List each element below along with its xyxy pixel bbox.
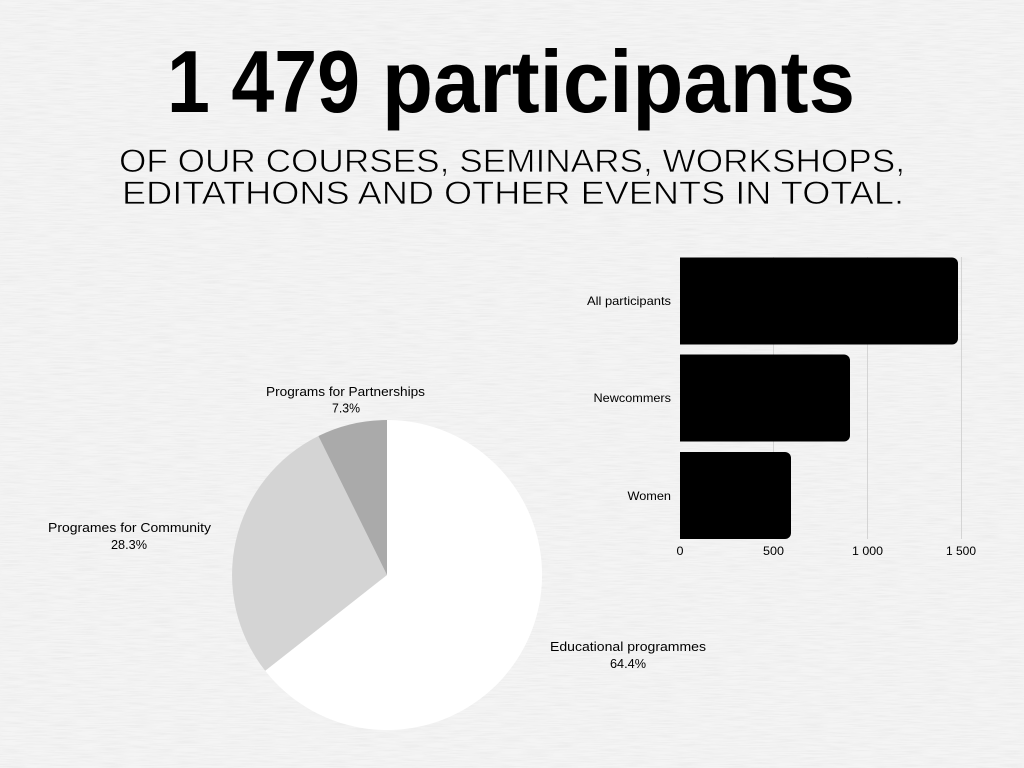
label: educational programmes: 64.4% <box>610 657 646 671</box>
label: educational programmes: Educational programmes <box>550 640 706 654</box>
label: programes for community: Programes for Community <box>48 521 212 535</box>
subtitle: OF OUR COURSES, SEMINARS, WORKSHOPS, <box>119 143 905 179</box>
category labels: Newcommers <box>594 391 671 405</box>
label: programs for partnerships: Programs for Partnerships <box>266 385 425 399</box>
axis labels: 0 <box>676 544 684 558</box>
slice: programs for partnerships 7.3% <box>318 420 387 575</box>
slice: programes for community 28.3% <box>232 436 387 671</box>
subtitle <box>119 143 905 211</box>
bar: newcommers <box>680 354 850 442</box>
label: programs for partnerships <box>266 385 425 416</box>
title: participants <box>382 32 855 131</box>
slice: educational programmes 64.4% <box>265 420 542 730</box>
label: programes for community <box>48 521 212 552</box>
axis labels: 500 <box>763 544 784 558</box>
axis labels <box>676 544 976 558</box>
label: programes for community: 28.3% <box>111 538 147 552</box>
category labels: All participants <box>587 294 671 308</box>
label: programs for partnerships: 7.3% <box>332 402 360 416</box>
title <box>167 32 855 131</box>
bar: all participants <box>680 258 958 344</box>
subtitle: EDITATHONS AND OTHER EVENTS IN TOTAL. <box>122 175 904 211</box>
axis labels: 1 500 <box>946 544 976 558</box>
category labels <box>587 294 671 503</box>
category labels: Women <box>628 489 671 503</box>
axis labels: 1 000 <box>852 544 883 558</box>
title: 1 479 <box>167 32 360 131</box>
bar chart: participants <box>587 257 976 558</box>
bar: women <box>680 452 791 539</box>
label: educational programmes <box>550 640 706 671</box>
pie chart: programmes <box>48 385 706 730</box>
